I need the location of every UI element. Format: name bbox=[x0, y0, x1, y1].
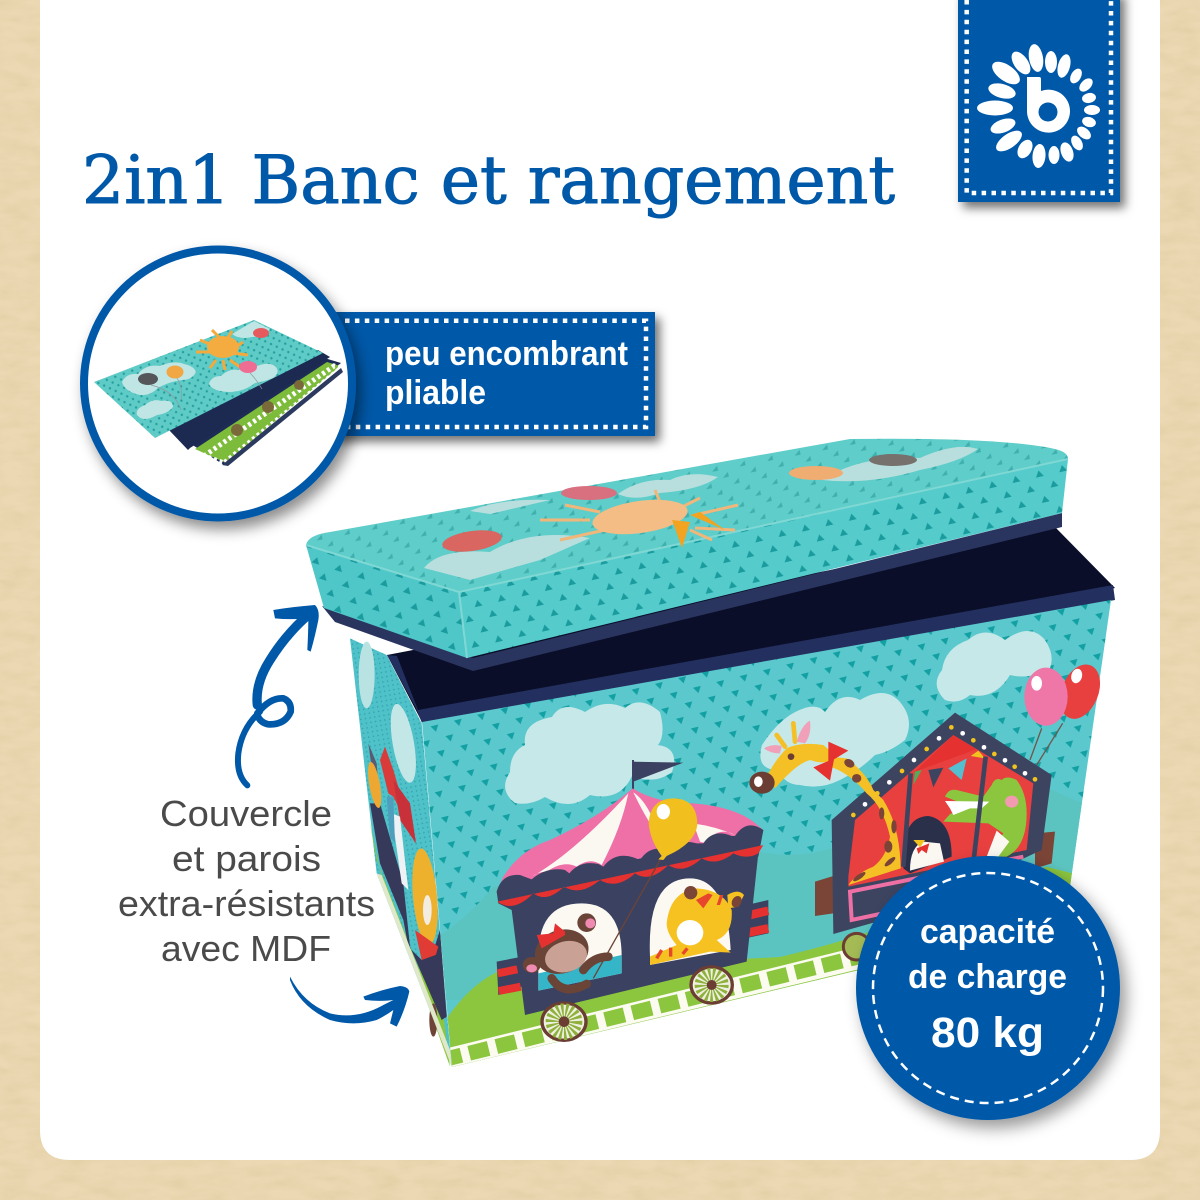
description text: Couvercle bbox=[160, 793, 332, 834]
balloons: pink and red bbox=[1024, 659, 1108, 765]
description text: et parois bbox=[172, 838, 321, 879]
giraffe bbox=[749, 721, 901, 885]
flag bbox=[633, 760, 683, 789]
wheels bbox=[542, 967, 732, 1040]
red interior bbox=[848, 735, 1033, 887]
printed lid decoration bbox=[424, 447, 978, 580]
lid lower trim bbox=[322, 513, 1062, 671]
crocodile bbox=[943, 777, 1027, 857]
patterned sky bbox=[422, 600, 1111, 1067]
sun bbox=[196, 330, 248, 370]
wheel behind badge bbox=[843, 933, 870, 960]
folded mat top bbox=[94, 320, 323, 438]
left window with monkey bbox=[523, 903, 622, 993]
lid edge highlights bbox=[306, 459, 1068, 658]
badge text: 80 kg bbox=[931, 1009, 1044, 1057]
badge text: de charge bbox=[908, 958, 1067, 996]
car body bbox=[497, 830, 763, 1015]
banner text: pliable bbox=[385, 374, 486, 412]
box interior bbox=[387, 527, 1115, 722]
green ground bbox=[448, 867, 1072, 1067]
callout banner: peu encombrant pliable bbox=[330, 312, 655, 436]
bunting bbox=[913, 735, 985, 787]
right window with tiger bbox=[650, 878, 744, 965]
banner text bbox=[385, 335, 628, 412]
circular inset: folded storage box bbox=[84, 250, 352, 518]
red scalloped band bbox=[497, 845, 763, 906]
track bbox=[450, 950, 858, 1067]
icon: brand flower logo bbox=[977, 43, 1100, 169]
clouds bbox=[505, 631, 1052, 804]
logo tag bbox=[958, 0, 1120, 202]
description text bbox=[118, 793, 375, 969]
roof lights bbox=[851, 725, 1037, 817]
badge text: capacité bbox=[920, 913, 1055, 951]
lid top face bbox=[306, 439, 1068, 592]
scalloped eave bbox=[497, 825, 763, 903]
folded mat underside bbox=[169, 350, 343, 466]
arrow: to lid bbox=[238, 605, 319, 785]
main product: toy storage bench bbox=[306, 439, 1120, 1080]
train car: animal house bbox=[749, 659, 1108, 960]
capacity badge bbox=[856, 856, 1120, 1120]
lid front face bbox=[459, 459, 1068, 658]
lower pink rail bbox=[850, 857, 1023, 920]
description text: extra-résistants bbox=[118, 883, 375, 924]
teal hill bbox=[437, 789, 1120, 1000]
box left side bbox=[350, 638, 452, 1067]
house frame bbox=[832, 713, 1052, 934]
cage posts bbox=[903, 757, 986, 867]
description text: avec MDF bbox=[161, 928, 331, 969]
hinged lid bbox=[306, 439, 1068, 671]
lid side face bbox=[306, 545, 467, 658]
banner text: peu encombrant bbox=[385, 335, 628, 373]
arrow: to side wall bbox=[290, 977, 409, 1027]
penguin bbox=[903, 816, 952, 873]
title: 2in1 Banc et rangement bbox=[82, 142, 895, 219]
front panel illustration bbox=[422, 600, 1111, 1067]
car coupling bars bbox=[497, 900, 768, 995]
box top trim bbox=[387, 585, 1115, 723]
tent roof bbox=[497, 788, 763, 892]
brown blocks bbox=[815, 832, 1055, 916]
balloon: yellow bbox=[593, 798, 697, 978]
train car: circus tent bbox=[497, 760, 768, 1040]
badge text bbox=[908, 913, 1067, 1057]
